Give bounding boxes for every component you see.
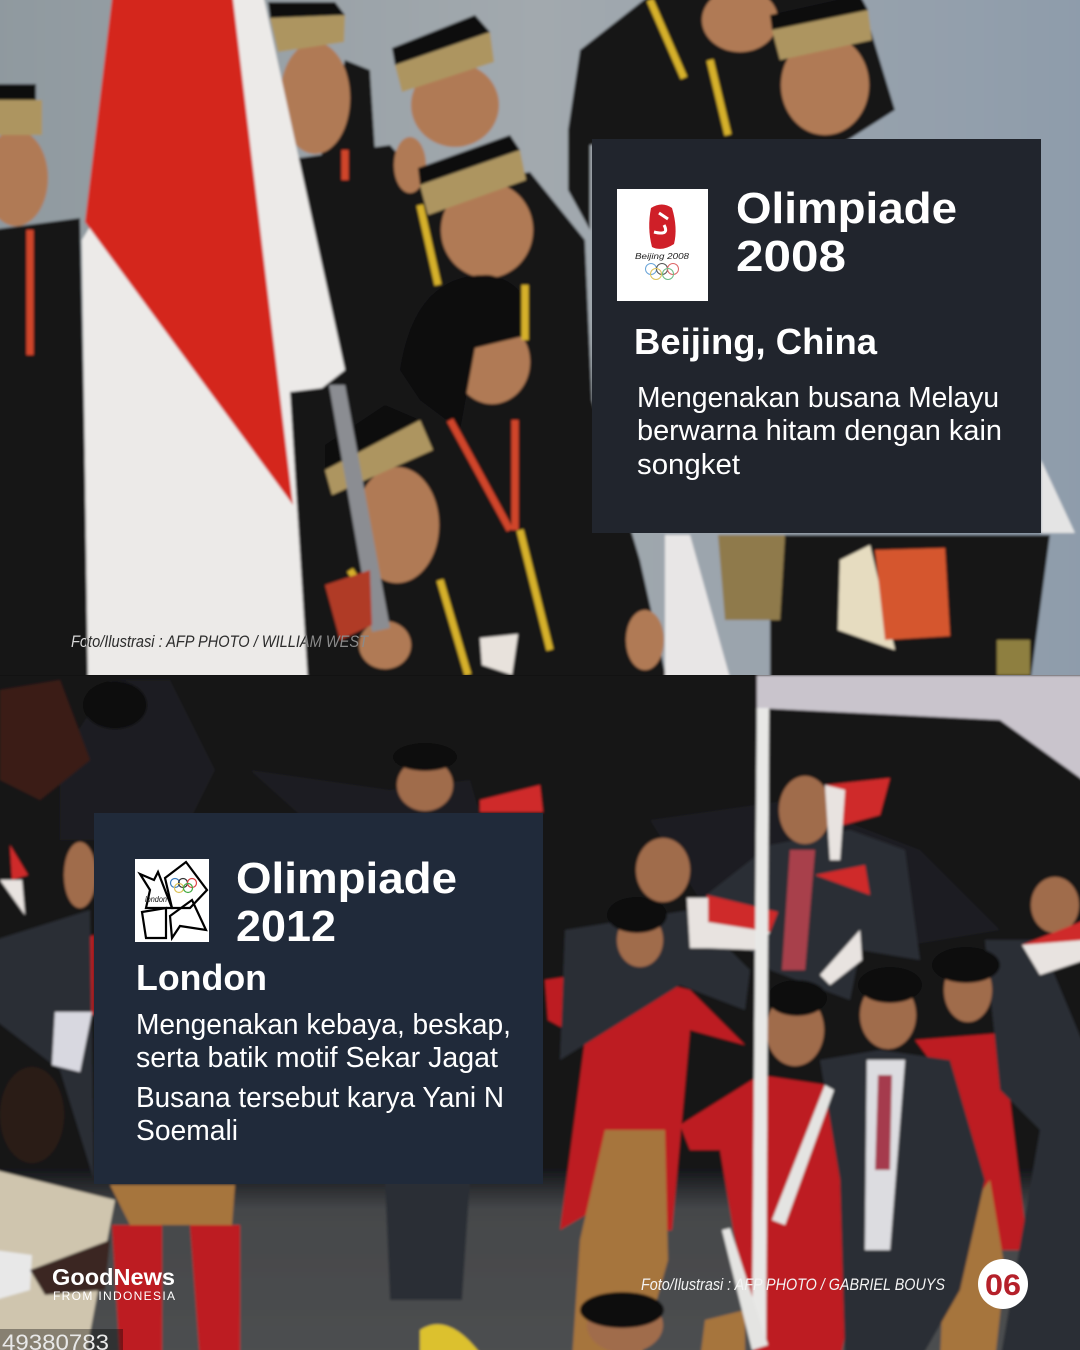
panel: Olimpiade 2012 bbox=[94, 813, 543, 1184]
heading: Olimpiade 2012: Olimpiade bbox=[236, 854, 457, 903]
subheading: city: Beijing, China bbox=[634, 321, 878, 362]
heading: Olimpiade 2008 bbox=[736, 184, 957, 281]
heading: Olimpiade 2008: Olimpiade bbox=[736, 184, 957, 233]
dark suits bbox=[0, 830, 1080, 1350]
description text bbox=[136, 1009, 511, 1147]
subheading: city: London bbox=[136, 957, 267, 998]
flag pole and sash bbox=[752, 708, 769, 1340]
small flags bbox=[10, 778, 1080, 960]
description text: Mengenakan busana Melayu bbox=[637, 382, 999, 414]
faces bbox=[64, 759, 1079, 1350]
description text: Busana tersebut karya Yani N bbox=[136, 1082, 504, 1114]
description text: Mengenakan kebaya, beskap, bbox=[136, 1009, 511, 1041]
icon: London 2012 logo bbox=[135, 859, 209, 942]
photo: 2008 Indonesian delegation with flag bbox=[0, 0, 1080, 685]
page number badge: 06 bbox=[985, 1269, 1021, 1302]
lanyard and badges bbox=[52, 1012, 92, 1072]
heading: Olimpiade 2008: 2008 bbox=[736, 232, 846, 281]
hand and pink accents bbox=[325, 570, 372, 640]
panel: Olimpiade 2008 bbox=[592, 139, 1041, 533]
description text: serta batik motif Sekar Jagat bbox=[136, 1042, 498, 1074]
caps and hair bbox=[83, 681, 1000, 1328]
flag at top right bbox=[757, 675, 1080, 785]
description text: Soemali bbox=[136, 1115, 238, 1147]
gold caps bbox=[0, 10, 872, 495]
hair bbox=[400, 275, 529, 430]
lanyards bbox=[30, 150, 515, 530]
people in black bbox=[0, 0, 1050, 685]
icon: Beijing 2008 logo: Beijing 2008 bbox=[635, 251, 689, 261]
photo: 2012 Indonesian delegation in red and batik bbox=[0, 675, 1080, 1350]
pole bbox=[329, 385, 390, 632]
background crowd bbox=[60, 680, 1000, 950]
photo credit: 2012: Foto/Ilustrasi : AFP PHOTO / GABRIEL BOUYS bbox=[641, 1275, 946, 1294]
heading: Olimpiade 2012 bbox=[236, 854, 457, 951]
girl in white at bottom left bbox=[0, 1170, 115, 1350]
description text: berwarna hitam dengan kain bbox=[637, 415, 1002, 447]
flag white part bbox=[82, 0, 345, 685]
faces bbox=[0, 0, 869, 670]
icon: Beijing 2008 logo bbox=[617, 189, 708, 301]
heading: Olimpiade 2012: 2012 bbox=[236, 902, 336, 951]
brand logo: GoodNews from Indonesia: GoodNews bbox=[52, 1264, 175, 1290]
icon: London 2012 logo: london bbox=[145, 895, 167, 904]
batik skirts bbox=[110, 1130, 1005, 1350]
people in red bbox=[88, 933, 1026, 1350]
description text bbox=[637, 382, 1002, 481]
brand logo: GoodNews from Indonesia: FROM INDONESIA bbox=[53, 1289, 175, 1303]
photo credit: 2008: Foto/Ilustrasi : AFP PHOTO / WILLIAM WEST bbox=[71, 632, 369, 651]
page number badge bbox=[978, 1259, 1028, 1309]
description text: songket bbox=[637, 449, 740, 481]
brand logo: GoodNews from Indonesia bbox=[52, 1264, 175, 1303]
